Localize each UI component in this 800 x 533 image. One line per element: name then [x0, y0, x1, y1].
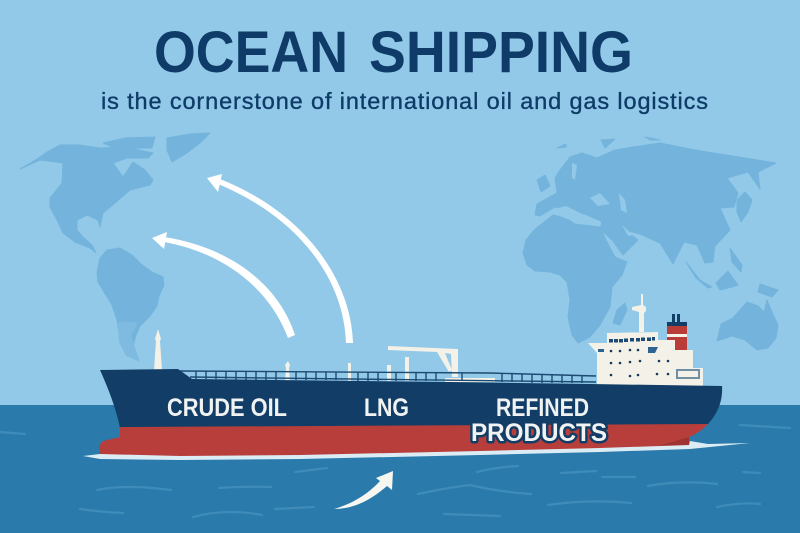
- funnel: [667, 314, 687, 350]
- crane: [388, 346, 458, 377]
- title: SHIPPING: [369, 20, 633, 85]
- sky background: [0, 0, 800, 405]
- label: refined: REFINED: [496, 394, 589, 422]
- hull navy: [100, 369, 722, 428]
- label: lng: LNG: [364, 394, 409, 422]
- arrow: upper route: [207, 174, 353, 343]
- subtitle: is the cornerstone of international oil and gas logistics: [101, 88, 708, 114]
- south america: [97, 248, 164, 350]
- arrow: lower route: [152, 232, 295, 338]
- label: crude oil: CRUDE OIL: [167, 394, 287, 422]
- hull red: [99, 424, 708, 456]
- bow mast: [154, 329, 162, 370]
- seas: [550, 163, 633, 236]
- africa: [523, 215, 627, 343]
- south america tail: [118, 322, 140, 362]
- arrow: sea route: [334, 471, 393, 509]
- deck railing: [180, 371, 596, 383]
- hull shadow: [655, 437, 689, 447]
- arctic islands: [103, 137, 155, 148]
- australia: [717, 300, 778, 350]
- sea: [0, 405, 800, 533]
- deck posts: [285, 357, 495, 382]
- world map: [20, 133, 778, 362]
- label: products: PRODUCTS: [471, 419, 607, 447]
- north america: [20, 145, 153, 253]
- islands: [537, 137, 778, 325]
- greenland: [167, 133, 210, 162]
- title: OCEAN: [154, 20, 348, 85]
- tanker ship: [83, 294, 750, 460]
- wake: [83, 441, 750, 460]
- eurasia: [535, 143, 776, 264]
- title: [154, 20, 633, 85]
- superstructure: [588, 294, 703, 386]
